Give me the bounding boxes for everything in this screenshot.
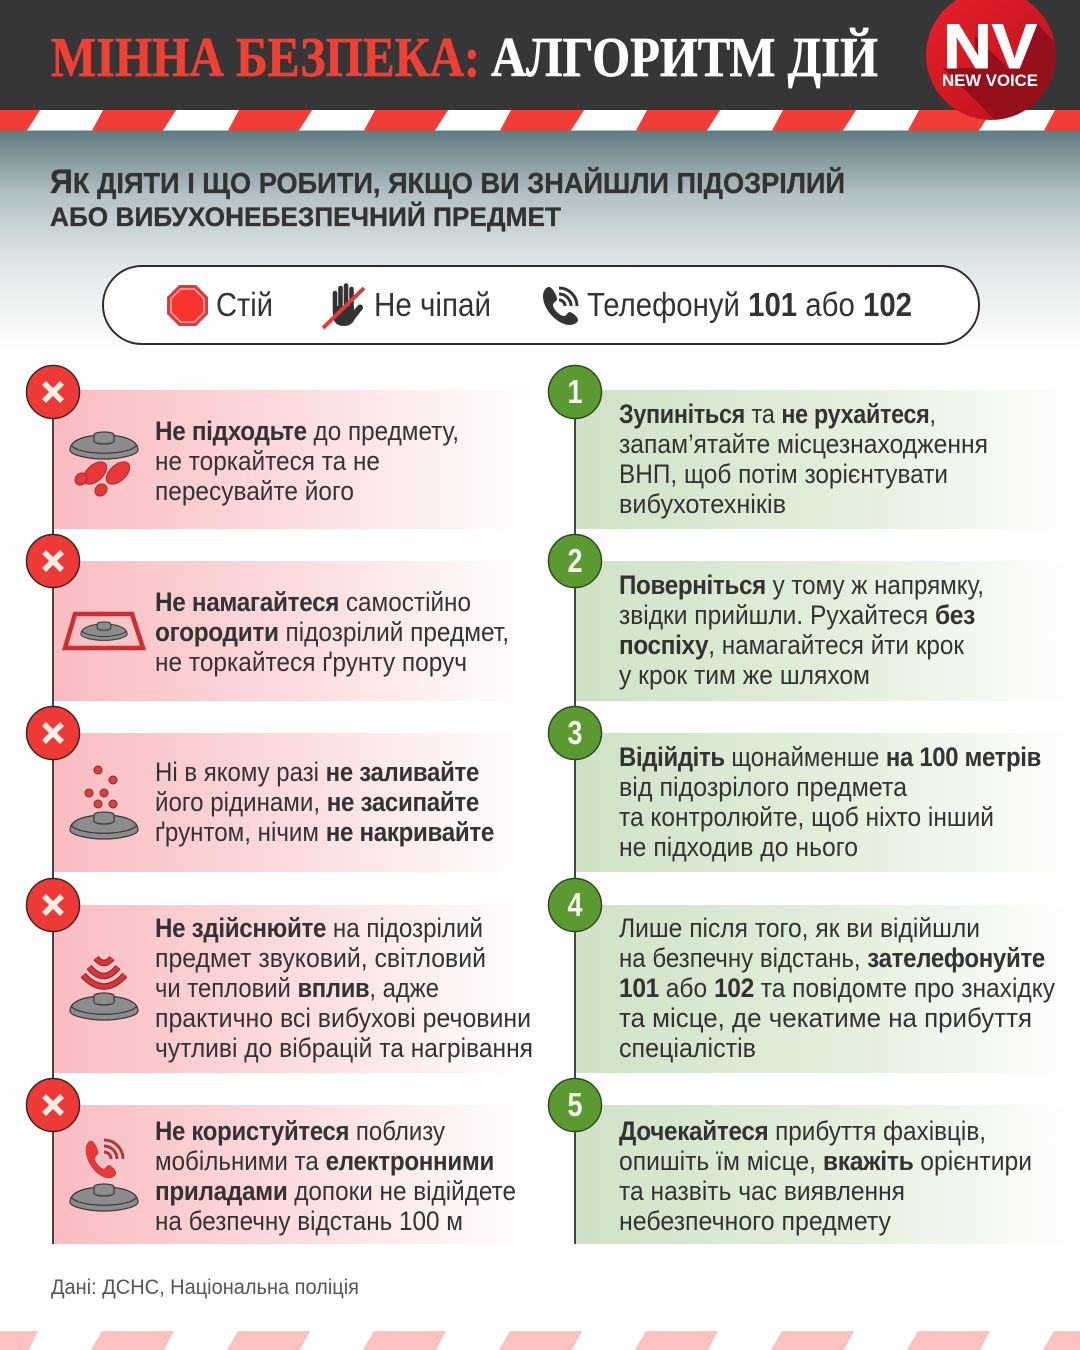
text: на безпечну відстань, зателефонуйте — [619, 943, 1045, 973]
text — [155, 757, 494, 847]
text — [155, 1116, 516, 1236]
panel: don't 1 — [54, 390, 534, 529]
badges: numbers — [548, 366, 602, 1132]
panel: do 4 — [576, 905, 1080, 1073]
text: мобільними та електронними — [155, 1146, 494, 1176]
icon: phone call — [543, 287, 578, 325]
logo: NV New Voice — [926, 0, 1056, 120]
panel: do 3 — [576, 733, 1080, 872]
panel: do 5 — [576, 1105, 1080, 1244]
text: ВНП, щоб потім зорієнтувати — [619, 459, 948, 489]
panel: do 2 — [576, 561, 1080, 701]
subtitle: АБО ВИБУХОНЕБЕЗПЕЧНИЙ ПРЕДМЕТ — [50, 201, 561, 232]
panel: don't 3 — [54, 733, 534, 872]
text: звідки прийшли. Рухайтеся без — [619, 600, 975, 630]
title: МІННА БЕЗПЕКА: — [51, 27, 480, 89]
badges: numbers: 2 — [568, 542, 582, 579]
subtitle: ЯК ДІЯТИ І ЩО РОБИТИ, ЯКЩО ВИ ЗНАЙШЛИ ПІДОЗРІЛИЙ — [50, 163, 845, 201]
icon: mine with falling particles — [70, 766, 138, 839]
timeline: left — [52, 392, 54, 1244]
title: АЛГОРИТМ ДІЙ — [491, 27, 878, 89]
text: Не намагайтеся самостійно — [155, 587, 471, 617]
text: ґрунтом, нічим не накривайте — [155, 817, 494, 847]
badges: numbers: 1 — [568, 373, 582, 410]
text: від підозрілого предмета — [619, 772, 908, 802]
icon: do not touch hand — [323, 286, 364, 328]
subtitle — [50, 163, 845, 232]
text: та назвіть час виявлення — [619, 1176, 905, 1206]
text: 101 або 102 та повідомте про знахідку — [619, 973, 1055, 1003]
text: небезпечного предмету — [619, 1206, 891, 1236]
text: не підходив до нього — [619, 832, 858, 862]
text: Поверніться у тому ж напрямку, — [619, 570, 984, 600]
text: Дочекайтеся прибуття фахівців, — [619, 1116, 986, 1146]
text: огородити підозрілий предмет, — [155, 617, 509, 647]
text — [619, 570, 984, 690]
label: stop: Стій — [216, 286, 273, 323]
logo: NV New Voice: NEW VOICE — [942, 71, 1038, 90]
text — [155, 587, 509, 677]
badges: numbers: 4 — [568, 886, 583, 923]
icon: mine with waves — [70, 958, 138, 1020]
text — [619, 913, 1055, 1063]
text: спеціалістів — [619, 1033, 756, 1063]
panel: do 1 — [576, 390, 1080, 529]
text: та місце, де чекатиме на прибуття — [619, 1003, 1032, 1033]
panel: don't 4 — [54, 905, 534, 1073]
text: предмет звуковий, світловий — [155, 943, 486, 973]
text — [155, 913, 533, 1063]
text: приладами допоки не відійдете — [155, 1176, 516, 1206]
label: call 101 or 102: Телефонуй 101 або 102 — [587, 286, 912, 323]
hazard stripe bottom — [0, 1331, 1080, 1350]
action pill — [103, 266, 979, 344]
text: чутливі до вібрацій та нагрівання — [155, 1033, 533, 1063]
text: практично всі вибухові речовини — [155, 1003, 531, 1033]
source note: Дані: ДСНС, Національна поліція — [51, 1276, 359, 1299]
text: вибухотехніків — [619, 489, 786, 519]
text — [619, 1116, 1032, 1236]
text: не торкайтеся та не — [155, 446, 380, 476]
icon: mine with fence — [65, 614, 143, 648]
hazard stripe top — [0, 110, 1080, 130]
text: поспіху, намагайтеся йти крок — [619, 630, 964, 660]
text — [619, 742, 1041, 862]
badges: numbers: 5 — [568, 1086, 582, 1123]
text: у крок тим же шляхом — [619, 660, 870, 690]
text — [155, 416, 459, 506]
text — [619, 399, 988, 519]
text: запам’ятайте місцезнаходження — [619, 429, 988, 459]
text: його рідинами, не засипайте — [155, 787, 479, 817]
panel: don't 5 — [54, 1105, 534, 1244]
text: опишіть їм місце, вкажіть орієнтири — [619, 1146, 1032, 1176]
text: Не користуйтеся поблизу — [155, 1116, 445, 1146]
timeline: right — [574, 392, 576, 1244]
text: Не підходьте до предмету, — [155, 416, 459, 446]
label: do not touch: Не чіпай — [374, 286, 491, 323]
logo: NV New Voice: NV — [943, 12, 1037, 82]
header band — [0, 0, 1080, 110]
text: пересувайте його — [155, 476, 354, 506]
text: та контролюйте, щоб ніхто інший — [619, 802, 994, 832]
background gradient — [0, 130, 1080, 352]
icon: mine with phone — [70, 1140, 138, 1211]
title — [51, 27, 878, 89]
panel: don't 2 — [54, 561, 534, 701]
badges: numbers: 3 — [568, 714, 582, 751]
text: Не здійснюйте на підозрілий — [155, 913, 483, 943]
icon: stop sign — [167, 285, 208, 326]
text: Зупиніться та не рухайтеся, — [619, 399, 936, 429]
text: на безпечну відстань 100 м — [155, 1206, 463, 1236]
text: Лише після того, як ви відійшли — [619, 913, 980, 943]
text: Ні в якому разі не заливайте — [155, 757, 479, 787]
text: чи тепловий вплив, адже — [155, 973, 439, 1003]
text: Відійдіть щонайменше на 100 метрів — [619, 742, 1041, 772]
icon: mine and footprints — [70, 432, 138, 498]
badges: cross — [26, 366, 80, 1132]
text: не торкайтеся ґрунту поруч — [155, 647, 467, 677]
